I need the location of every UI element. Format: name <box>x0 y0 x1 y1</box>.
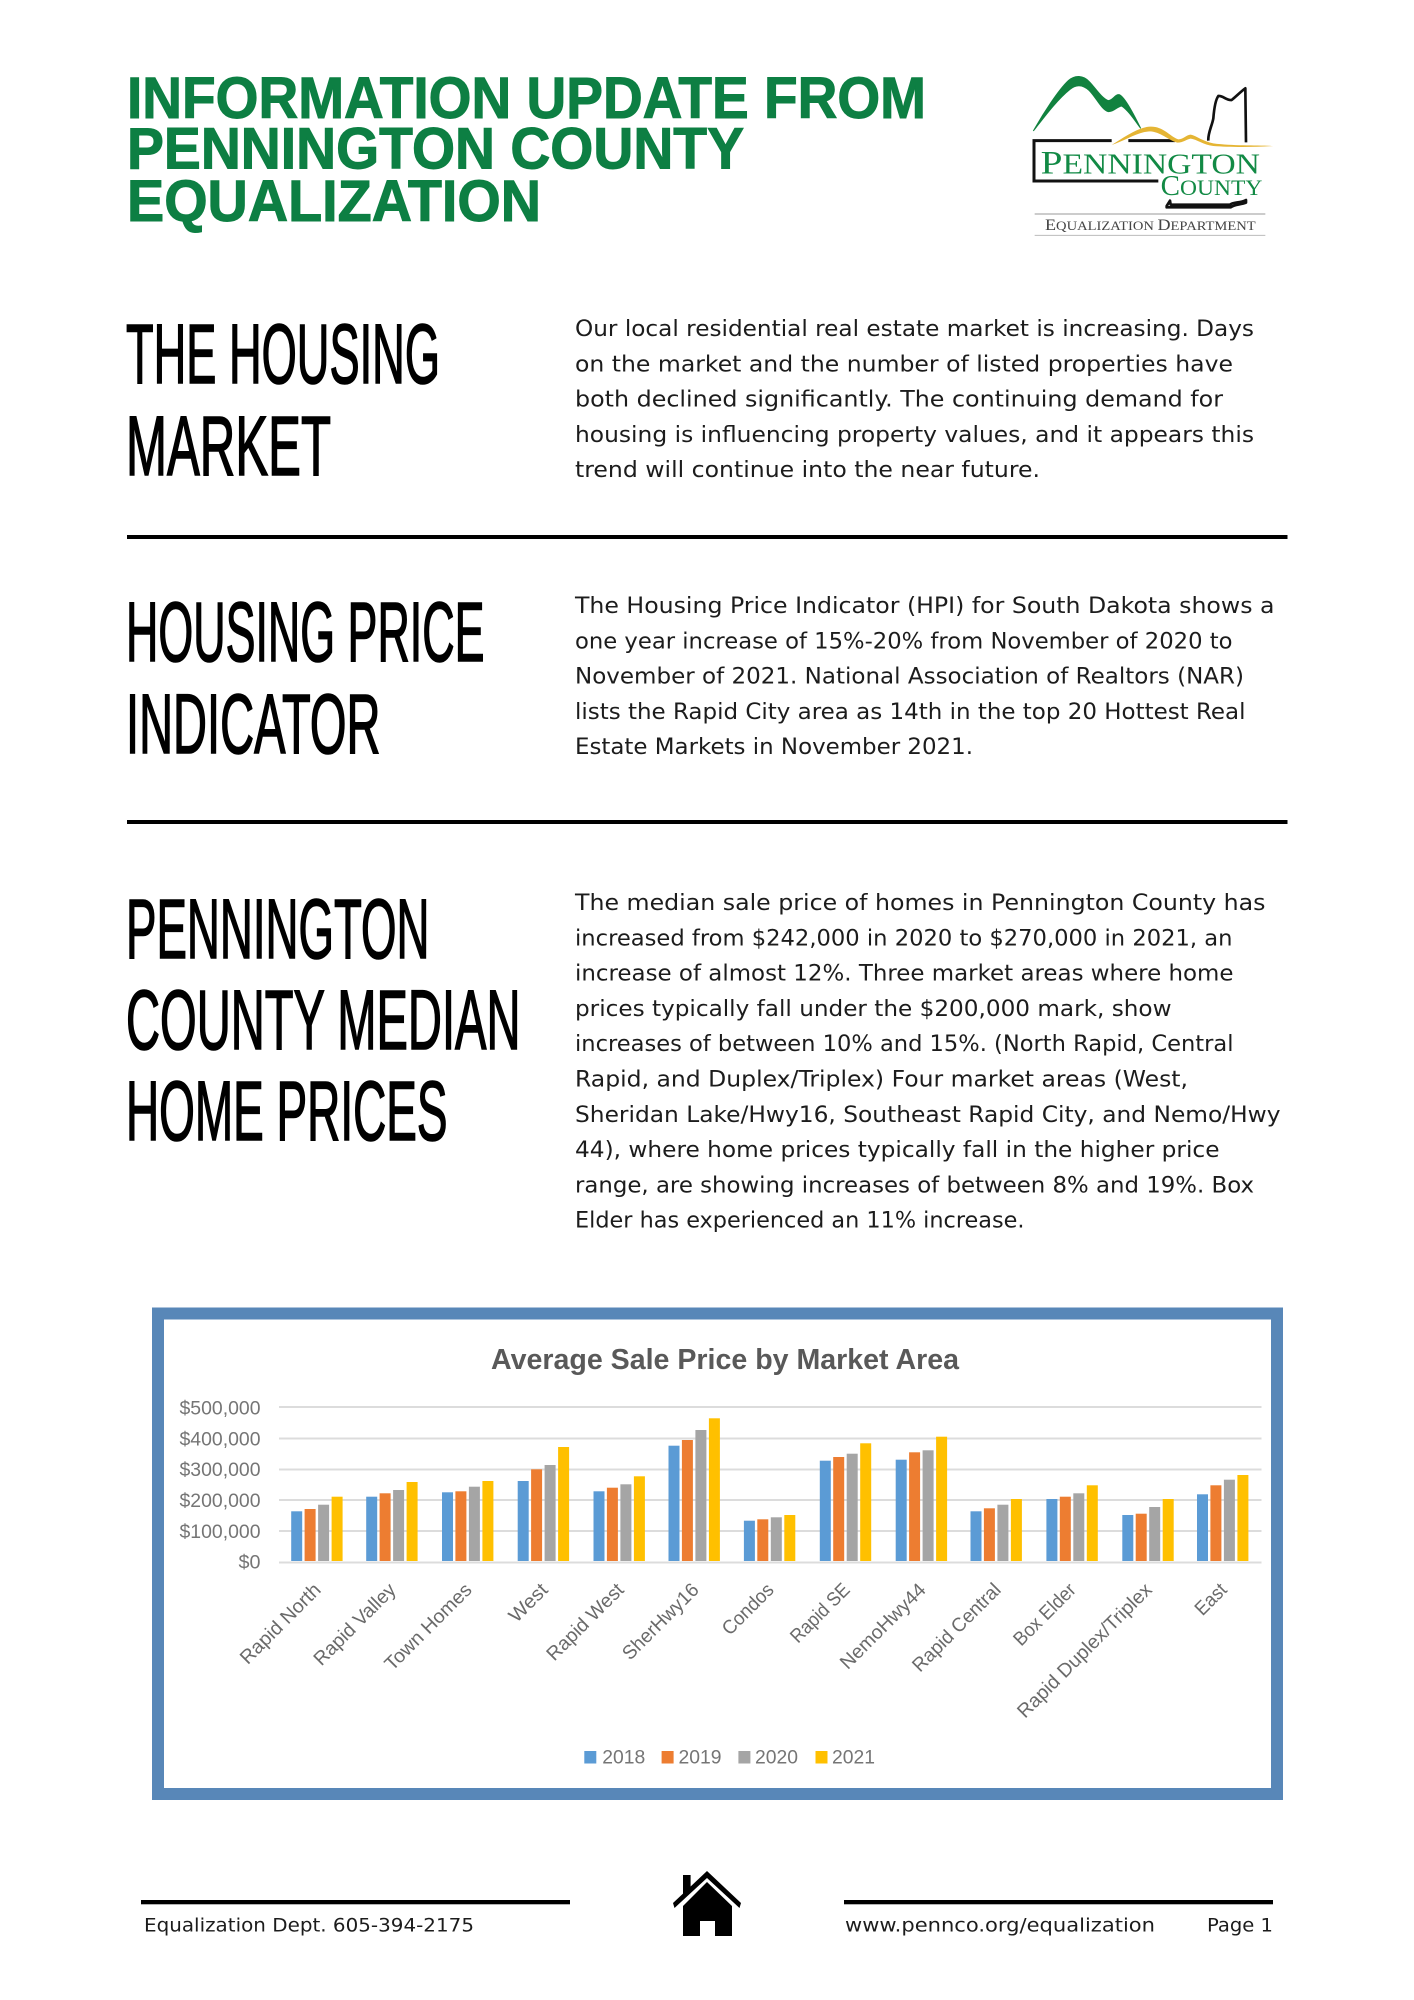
chart legend: 2019 <box>678 1746 722 1768</box>
text block: housing market: trend will continue into the near future. <box>575 458 1040 483</box>
logo icon: yellow swoosh <box>1112 127 1273 147</box>
logo wordmark: Pennington: PENNINGTON <box>1041 145 1260 181</box>
chart x axis labels: Rapid Central <box>908 1579 1006 1677</box>
chart legend <box>584 1746 875 1768</box>
footer: right rule, website and page number: Page 1 <box>1207 1914 1273 1936</box>
heading: the housing market <box>126 307 440 493</box>
chart legend: 2018 <box>602 1746 645 1768</box>
text block: median home prices: increase of almost 12%. Three market areas where home <box>575 962 1234 987</box>
chart x axis labels: Rapid North <box>236 1579 326 1669</box>
bars: Rapid North <box>291 1497 343 1561</box>
chart y axis labels: $0 <box>238 1552 261 1574</box>
heading: housing price indicator: INDICATOR <box>126 677 380 771</box>
chart y axis labels: $100,000 <box>180 1521 261 1543</box>
text block: median home prices: Rapid, and Duplex/Triplex) Four market areas (West, <box>575 1068 1188 1092</box>
title <box>127 66 926 234</box>
chart y axis labels <box>180 1398 261 1574</box>
logo wordmark: Equalization Department: EQUALIZATION DEPARTMENT <box>1045 217 1256 234</box>
bars: Town Homes <box>442 1481 493 1561</box>
bars: Rapid Valley <box>366 1482 418 1561</box>
chart title: Average Sale Price by Market Area <box>491 1344 960 1376</box>
text block: median home prices: prices typically fall under the $200,000 mark, show <box>575 997 1172 1022</box>
chart x axis labels <box>236 1579 1232 1723</box>
icon: house <box>673 1871 741 1936</box>
chart y axis labels: $400,000 <box>180 1428 261 1450</box>
text block: housing market: Our local residential real estate market is increasing. Days <box>575 317 1254 342</box>
heading: Pennington County median home prices: COUNTY MEDIAN <box>126 973 520 1067</box>
logo icon: county outline <box>1167 88 1246 207</box>
title: EQUALIZATION <box>127 169 541 234</box>
text block: housing market: housing is influencing property values, and it appears this <box>575 423 1254 448</box>
bars: NemoHwy44 <box>896 1437 947 1561</box>
text block: housing price indicator: one year increase of 15%-20% from November of 2020 to <box>575 629 1232 654</box>
heading: the housing market: THE HOUSING <box>126 307 440 401</box>
text block: housing market: on the market and the number of listed properties have <box>575 352 1233 377</box>
bar chart <box>291 1418 1248 1561</box>
text block: median home prices: increases of between 10% and 15%. (North Rapid, Central <box>575 1032 1234 1057</box>
logo icon: black frame <box>1034 141 1175 181</box>
text block: median home prices: 44), where home prices typically fall in the higher price <box>575 1138 1220 1163</box>
chart y axis labels: $200,000 <box>180 1490 261 1512</box>
bars: Rapid West <box>594 1476 645 1561</box>
text block: housing price indicator <box>574 594 1274 760</box>
heading: housing price indicator <box>126 585 484 771</box>
heading: Pennington County median home prices: HOME PRICES <box>126 1064 448 1158</box>
text block: median home prices <box>574 891 1280 1234</box>
chart x axis labels: NemoHwy44 <box>836 1579 931 1674</box>
title: INFORMATION UPDATE FROM <box>127 66 926 131</box>
text block: median home prices: Elder has experienced an 11% increase. <box>575 1209 1024 1234</box>
text block: housing market <box>575 317 1254 483</box>
text block: median home prices: range, are showing increases of between 8% and 19%. Box <box>575 1173 1254 1198</box>
footer: right rule, website and page number <box>844 1900 1273 1936</box>
text block: housing market: both declined significantly. The continuing demand for <box>575 388 1224 413</box>
heading: Pennington County median home prices: PENNINGTON <box>126 882 430 976</box>
logo wordmark: County: COUNTY <box>1161 171 1262 202</box>
footer: right rule, website and page number: www.pennco.org/equalization <box>845 1914 1155 1936</box>
text block: median home prices: Sheridan Lake/Hwy16, Southeast Rapid City, and Nemo/Hwy <box>575 1103 1280 1128</box>
bars: Condos <box>744 1515 795 1561</box>
text block: housing price indicator: lists the Rapid City area as 14th in the top 20 Hottest Real <box>575 700 1246 725</box>
chart x axis labels: East <box>1191 1579 1232 1620</box>
chart x axis labels: Box Elder <box>1009 1579 1081 1650</box>
heading: housing price indicator: HOUSING PRICE <box>126 585 484 679</box>
footer: left rule and contact: Equalization Dept. 605-394-2175 <box>144 1914 474 1936</box>
heading: the housing market: MARKET <box>126 399 331 493</box>
text block: median home prices: The median sale price of homes in Pennington County has <box>574 891 1266 916</box>
chart x axis labels: West <box>504 1579 553 1627</box>
chart x axis labels: Rapid Duplex/Triplex <box>1013 1579 1157 1723</box>
bars: Rapid Duplex/Triplex <box>1122 1499 1174 1561</box>
text block: housing price indicator: November of 2021. National Association of Realtors (NAR) <box>575 665 1244 690</box>
bars: Rapid SE <box>820 1443 871 1561</box>
chart x axis labels: Rapid West <box>542 1579 629 1665</box>
heading: Pennington County median home prices <box>126 882 520 1158</box>
bars: West <box>518 1447 569 1561</box>
chart x axis labels: Condos <box>718 1579 779 1640</box>
text block: housing price indicator: The Housing Price Indicator (HPI) for South Dakota shows a <box>574 594 1274 619</box>
chart legend: 2021 <box>832 1746 875 1768</box>
logo icon: green mountain <box>1033 77 1141 131</box>
footer: left rule and contact <box>141 1900 570 1936</box>
chart legend: 2020 <box>755 1746 798 1768</box>
bars: Box Elder <box>1046 1485 1098 1561</box>
text block: housing price indicator: Estate Markets in November 2021. <box>575 735 973 760</box>
bars: SherHwy16 <box>668 1418 720 1561</box>
logo: Pennington County Equalization Department <box>1033 77 1273 235</box>
bars: East <box>1197 1475 1248 1561</box>
chart x axis labels: SherHwy16 <box>618 1579 704 1665</box>
chart x axis labels: Rapid Valley <box>309 1579 401 1670</box>
chart y axis labels: $300,000 <box>180 1459 261 1481</box>
panel: average sale price chart <box>158 1314 1277 1794</box>
chart y axis labels: $500,000 <box>180 1398 261 1420</box>
chart x axis labels: Town Homes <box>380 1579 477 1675</box>
text block: median home prices: increased from $242,000 in 2020 to $270,000 in 2021, an <box>575 926 1232 951</box>
chart gridlines <box>279 1407 1262 1562</box>
bars: Rapid Central <box>970 1499 1022 1561</box>
title: PENNINGTON COUNTY <box>127 116 744 182</box>
chart x axis labels: Rapid SE <box>786 1579 855 1648</box>
